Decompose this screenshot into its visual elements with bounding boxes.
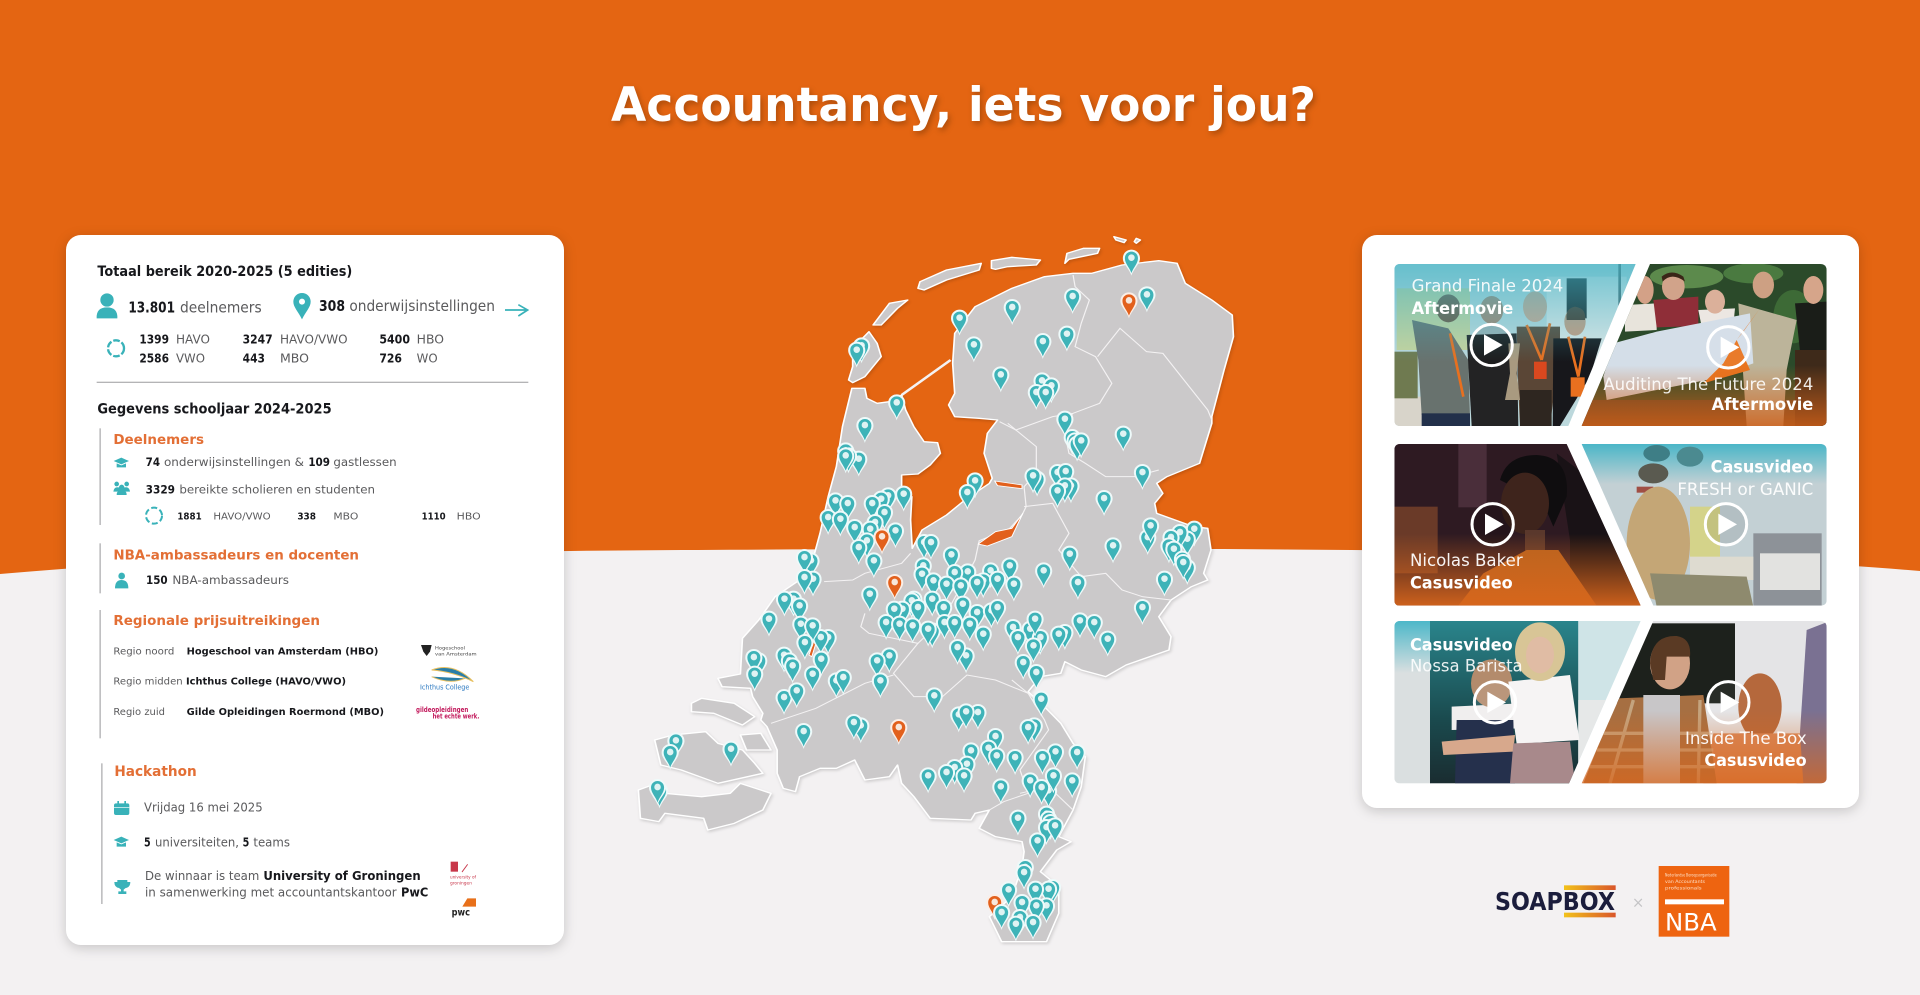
logo: NBA: van Accountants: [1665, 879, 1706, 885]
line: winner: in samenwerking met accountantskantoor: [145, 886, 397, 900]
line: universities and teams: teams: [253, 836, 290, 850]
line: institutions and guest lessons: gastlessen: [333, 455, 397, 469]
total by school type: [139, 332, 444, 366]
video tile: Nicolas Baker: [1394, 444, 1643, 607]
caption: [1603, 375, 1813, 414]
map of the Netherlands with school pins: [638, 237, 1233, 942]
video tile: Auditing The Future: [1580, 263, 1828, 427]
partially hidden orange pin in the south: [986, 894, 1003, 920]
logo: University of Groningen: university of: [450, 875, 476, 881]
heading: total reach: Totaal bereik 2020-2025 (5 edities): [97, 264, 352, 280]
inland water slivers: [809, 481, 1023, 657]
line: ambassadors: NBA-ambassadeurs: [172, 573, 289, 587]
award rows: Regio midden: [113, 677, 183, 688]
stat: participants: deelnemers: [180, 300, 262, 317]
total by school type: VWO: [176, 352, 205, 366]
line: institutions and guest lessons: [146, 455, 397, 469]
panel upper part: totals and school year: [97, 264, 528, 593]
icon: location pin: [293, 293, 311, 319]
icon: play: [1474, 682, 1516, 723]
video tile: Grand Finale: [1394, 264, 1638, 427]
logo: Soapbox: SOAPBOX: [1495, 887, 1615, 916]
province borders, dike and inland water: [771, 275, 1212, 810]
heading: ambassadors: NBA-ambassadeurs en docenten: [113, 548, 359, 563]
icon: ambassador: [115, 573, 128, 588]
participants by school type: HAVO/VWO: [213, 511, 271, 522]
logo: NBA: NBA: [1665, 909, 1717, 937]
icon: play: [1708, 327, 1749, 368]
icon: dashed ring: [146, 508, 162, 524]
caption: Casusvideo: [1704, 751, 1807, 770]
logo: Ichthus College: [420, 668, 473, 691]
total by school type: MBO: [280, 352, 309, 366]
panel: videos: [1362, 235, 1859, 808]
icon: play: [1708, 682, 1749, 723]
logo: NBA: [1659, 866, 1729, 937]
award rows: Regio zuid: [113, 707, 165, 718]
logo: NBA: professionals: [1665, 886, 1702, 892]
total by school type: HAVO/VWO: [280, 332, 348, 346]
provinces and islands: [638, 237, 1233, 942]
line: institutions and guest lessons: onderwijsinstellingen &: [164, 455, 304, 469]
total by school type: 5400: [379, 332, 410, 346]
total by school type: 3247: [243, 332, 273, 346]
participants by school type: 1881: [177, 511, 202, 522]
caption: Auditing The Future 2024: [1603, 375, 1813, 394]
logo: Gilde Opleidingen: [416, 706, 479, 721]
title: Accountancy, iets voor jou?: [611, 78, 1316, 133]
logo: Hogeschool van Amsterdam: [421, 645, 477, 657]
logo: Gilde Opleidingen: gildeopleidingen: [416, 706, 469, 714]
total by school type: 726: [379, 352, 402, 366]
icon: graduation cap: [114, 458, 129, 467]
participants by school type: MBO: [333, 511, 358, 522]
stat: participants: 13.801: [128, 300, 175, 317]
line: winner: De winnaar is team: [145, 869, 259, 883]
icon: play: [1705, 504, 1747, 545]
participants by school type: [177, 511, 481, 522]
video tiles row three: [1394, 621, 1828, 937]
icon: play: [1471, 324, 1512, 366]
icon: person: [97, 293, 117, 318]
panel: statistics: [66, 235, 564, 945]
award rows: Gilde Opleidingen Roermond (MBO): [187, 707, 384, 718]
stat: institutions: 308: [319, 298, 345, 315]
logo: University of Groningen: [450, 862, 476, 886]
logo: Ichthus College: Ichthus College: [420, 682, 470, 691]
icon: calendar: [114, 801, 129, 815]
line: institutions and guest lessons: 74: [146, 455, 160, 469]
caption: FRESH or GANIC: [1677, 480, 1813, 499]
caption: Grand Finale 2024: [1412, 277, 1563, 296]
line: students reached: bereikte scholieren en studenten: [179, 482, 375, 496]
icon: group of people: [113, 482, 130, 495]
total by school type: HAVO: [176, 332, 210, 346]
participants by school type: 1110: [422, 511, 446, 522]
separator: times sign: ×: [1632, 894, 1644, 911]
line: universities and teams: 5: [144, 836, 151, 850]
award rows: [113, 646, 384, 718]
caption: Nicolas Baker: [1410, 551, 1523, 570]
total by school type: 2586: [139, 352, 169, 366]
participants by school type: 338: [297, 511, 316, 522]
participants by school type: HBO: [457, 511, 481, 522]
caption: [1410, 636, 1523, 676]
icon: trophy: [114, 880, 130, 894]
total by school type: 443: [243, 352, 265, 366]
school pins: [649, 250, 1203, 942]
video tile: Nossa Barista: [1394, 621, 1642, 784]
logo: PwC: [452, 898, 476, 918]
line: institutions and guest lessons: 109: [308, 455, 330, 469]
caption: Aftermovie: [1712, 395, 1813, 414]
caption: [1410, 551, 1523, 592]
caption: Inside The Box: [1685, 729, 1807, 748]
heading: hackathon: Hackathon: [114, 764, 197, 780]
caption: Aftermovie: [1412, 299, 1513, 318]
line: winner: PwC: [401, 886, 429, 900]
line: ambassadors: 150: [146, 573, 168, 587]
line: date: Vrijdag 16 mei 2025: [144, 801, 263, 815]
logo: Hogeschool van Amsterdam: Hogeschool: [435, 645, 465, 651]
award rows: Ichthus College (HAVO/VWO): [186, 677, 346, 688]
line: universities and teams: 5: [243, 836, 249, 850]
heading: school year: Gegevens schooljaar 2024-2025: [97, 401, 332, 417]
caption: Casusvideo: [1410, 573, 1513, 592]
logo: University of Groningen: groningen: [450, 880, 472, 886]
panel lower part: awards and hackathon: [99, 610, 479, 918]
video tile: FRESH or GANIC: [1580, 444, 1828, 607]
total by school type: WO: [417, 352, 438, 366]
award rows: Hogeschool van Amsterdam (HBO): [187, 646, 378, 657]
total by school type: 1399: [139, 332, 169, 346]
caption: [1677, 458, 1813, 499]
video tiles rows one and two: [1394, 263, 1828, 607]
line: winner: University of Groningen: [263, 869, 421, 883]
total by school type: HBO: [417, 332, 444, 346]
award rows: Regio noord: [113, 646, 174, 657]
caption: Casusvideo: [1410, 636, 1513, 655]
caption: [1685, 729, 1807, 770]
logo: Hogeschool van Amsterdam: van Amsterdam: [435, 651, 477, 657]
stat: institutions: onderwijsinstellingen: [349, 298, 495, 315]
logo: NBA: Nederlandse Beroepsorganisatie: [1665, 872, 1717, 878]
icon: arrow: [505, 305, 528, 316]
line: universities and teams: [144, 836, 290, 850]
line: universities and teams: universiteiten,: [155, 836, 239, 850]
line: students reached: 3329: [146, 482, 175, 496]
caption: Nossa Barista: [1410, 657, 1523, 676]
heading: participants: Deelnemers: [113, 433, 204, 448]
video tile: Inside The Box: [1580, 621, 1828, 785]
logo: Gilde Opleidingen: het echte werk.: [433, 713, 479, 721]
logo: PwC: pwc: [452, 907, 470, 918]
icon: graduation cap: [114, 837, 129, 847]
icon: dashed ring: [108, 340, 124, 356]
stat: participants: [128, 300, 262, 317]
line: winner: [145, 869, 429, 900]
caption: Casusvideo: [1711, 458, 1813, 477]
caption: [1412, 277, 1563, 318]
heading: regional awards: Regionale prijsuitreikingen: [113, 614, 320, 629]
icon: play: [1472, 504, 1513, 545]
